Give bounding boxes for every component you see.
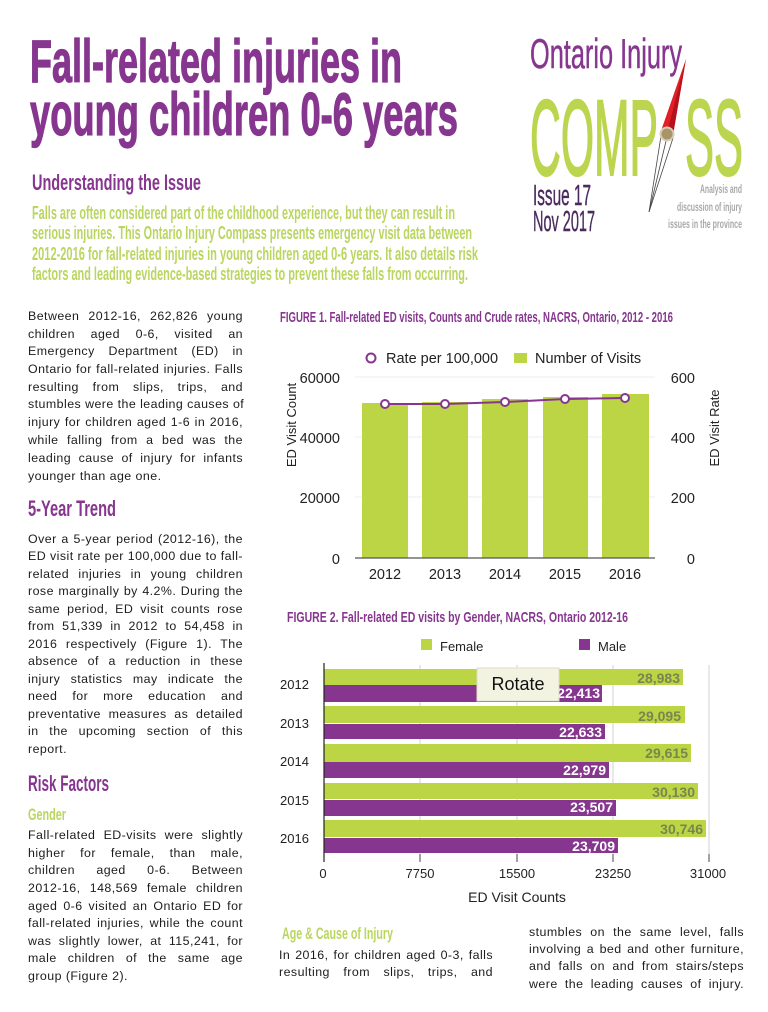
female value labels: 30,130: [652, 784, 695, 800]
text block: overview: [28, 309, 244, 483]
intro paragraph: serious injuries. This Ontario Injury Compass presents emergency visit data between: [32, 223, 472, 243]
text block: 5-year trend: from 51,339 in 2012 to 54,458 in: [28, 619, 243, 633]
text block: 5-year trend: Over a 5-year period (2012-16), the: [28, 532, 243, 546]
text block: overview: leading cause of injury for infants: [28, 451, 243, 465]
year labels: [280, 677, 309, 846]
intro paragraph: Falls are often considered part of the childhood experience, but they can result in: [32, 203, 455, 223]
legend: figure 1: [366, 351, 641, 367]
year labels: 2013: [280, 716, 309, 731]
text block: gender: [28, 828, 243, 983]
text block: 5-year trend: need for more education and: [28, 689, 243, 703]
legend: figure 1: Number of Visits: [535, 351, 641, 367]
heading: risk factors: Risk Factors: [28, 771, 109, 796]
text block: age and cause, column 1: In 2016, for children aged 0-3, falls: [279, 948, 493, 962]
text block: gender: Fall-related ED-visits were slightly: [28, 828, 243, 842]
text block: gender: was slightly lower, at 115,241, for: [28, 934, 243, 948]
logo: Ontario Injury Compass: Issue 17: [533, 180, 591, 212]
intro paragraph: 2012-2016 for fall-related injuries in young children aged 0-6 years. It also details risk: [32, 244, 479, 264]
text block: 5-year trend: ED visit rate per 100,000 due to fall-: [28, 549, 243, 563]
text block: gender: higher for female, than male,: [28, 846, 243, 860]
heading: 5-year trend: 5-Year Trend: [28, 496, 116, 521]
female value labels: [637, 670, 703, 837]
text block: age and cause, column 1: [279, 948, 493, 979]
title: Fall-related injuries in: [30, 28, 402, 95]
text block: overview: children aged 0-6, visited an: [28, 327, 243, 341]
x axis labels: 23250: [595, 866, 631, 881]
right axis labels: 400: [671, 431, 695, 447]
text block: age and cause, column 2: and falls on and from stairs/steps: [529, 959, 744, 973]
bars: number of visits: [362, 394, 649, 558]
male value labels: 22,979: [563, 762, 606, 778]
female value labels: 28,983: [637, 670, 680, 686]
legend: figure 2: [421, 639, 626, 654]
right axis labels: [671, 371, 695, 568]
title: [30, 28, 458, 148]
year labels: 2013: [429, 567, 461, 583]
text block: 5-year trend: same period, ED visit counts rose: [28, 602, 243, 616]
left axis labels: [300, 371, 340, 568]
tooltip: rotate: Rotate: [491, 674, 545, 694]
text block: 5-year trend: preventative measures as detailed: [28, 707, 243, 721]
bars: male: [324, 685, 618, 853]
right axis labels: 0: [687, 552, 695, 568]
icon: compass needle: [649, 59, 686, 212]
text block: 5-year trend: rose marginally by 4.2%. During the: [28, 584, 243, 598]
right axis labels: 600: [671, 371, 695, 387]
x axis labels: [319, 866, 726, 881]
text block: gender: children aged 0-6. Between: [28, 863, 243, 877]
text block: age and cause, column 2: involving a bed and other furniture,: [529, 942, 744, 956]
female value labels: 29,095: [638, 708, 681, 724]
x axis labels: 15500: [499, 866, 535, 881]
male value labels: 23,709: [572, 838, 615, 854]
text block: age and cause, column 1: resulting from slips, trips, and: [279, 965, 493, 979]
text block: 5-year trend: 2016 respectively (Figure 1). The: [28, 637, 243, 651]
year labels: 2016: [609, 567, 641, 583]
x axis labels: 31000: [690, 866, 726, 881]
text block: 5-year trend: injury statistics may indicate the: [28, 672, 243, 686]
text block: 5-year trend: report.: [28, 742, 67, 756]
text block: age and cause, column 2: stumbles on the same level, falls: [529, 925, 744, 939]
chart: figure 2 bar chart: [280, 639, 726, 905]
x axis labels: 0: [319, 866, 327, 881]
x axis title: ED Visit Counts: [468, 889, 566, 905]
year labels: 2012: [369, 567, 401, 583]
text block: gender: male children of the same age: [28, 951, 243, 965]
text block: 5-year trend: absence of a reduction in these: [28, 654, 243, 668]
year labels: 2016: [280, 831, 309, 846]
year labels: 2014: [489, 567, 521, 583]
right axis labels: 200: [671, 491, 695, 507]
male value labels: [557, 685, 615, 854]
text block: age and cause, column 2: were the leading causes of injury.: [529, 977, 744, 991]
legend: figure 2: Female: [440, 639, 483, 654]
text block: overview: while falling from a bed was the: [28, 433, 243, 447]
logo: Ontario Injury Compass: Nov 2017: [533, 206, 595, 238]
left axis labels: 0: [332, 552, 340, 568]
text block: gender: 2012-16, 148,569 female children: [28, 881, 243, 895]
year labels: 2015: [549, 567, 581, 583]
text block: 5-year trend: in the upcoming section of this: [28, 724, 243, 738]
text block: overview: resulting from slips, trips, and: [28, 380, 243, 394]
intro paragraph: factors and leading evidence-based strategies to prevent these falls from occurring.: [32, 264, 468, 284]
left axis labels: 20000: [300, 491, 340, 507]
year labels: 2012: [280, 677, 309, 692]
tooltip: rotate: [477, 668, 559, 701]
female value labels: 29,615: [645, 745, 688, 761]
right axis title: ED Visit Rate: [707, 389, 722, 467]
text block: age and cause, column 2: [529, 925, 744, 991]
line: rate per 100,000: [381, 394, 629, 408]
figure 2 title: FIGURE 2. Fall-related ED visits by Gender, NACRS, Ontario 2012-16: [287, 609, 628, 626]
left axis title: ED Visit Count: [284, 382, 299, 467]
logo: Ontario Injury Compass: [530, 30, 743, 238]
heading: age and cause of injury: Age & Cause of Injury: [282, 924, 393, 943]
text block: gender: group (Figure 2).: [28, 969, 128, 983]
text block: overview: Between 2012-16, 262,826 young: [28, 309, 243, 323]
text block: overview: younger than age one.: [28, 469, 161, 483]
female value labels: 30,746: [660, 821, 703, 837]
text block: gender: fall-related injuries, while the count: [28, 916, 243, 930]
year labels: [369, 567, 641, 583]
bars: female: [324, 669, 706, 837]
text block: gender: aged 0-6 visited an Ontario ED for: [28, 899, 243, 913]
male value labels: 22,413: [557, 685, 600, 701]
male value labels: 22,633: [559, 724, 602, 740]
intro paragraph: [32, 203, 479, 284]
left axis labels: 40000: [300, 431, 340, 447]
x axis labels: 7750: [406, 866, 434, 881]
year labels: 2015: [280, 793, 309, 808]
left axis labels: 60000: [300, 371, 340, 387]
text block: 5-year trend: [28, 532, 243, 756]
legend: figure 2: Male: [598, 639, 626, 654]
text block: overview: Ontario for fall-related injuries. Falls: [28, 362, 243, 376]
chart: figure 1 combo chart: [284, 351, 722, 583]
heading: gender: Gender: [28, 805, 66, 824]
text block: overview: injury for children aged 1-6 in 2016,: [28, 415, 243, 429]
text block: 5-year trend: related injuries in young children: [28, 567, 243, 581]
text block: overview: Emergency Department (ED) in: [28, 344, 243, 358]
text block: overview: stumbles were the leading causes of: [28, 397, 244, 411]
title: young children 0-6 years: [30, 81, 458, 148]
legend: figure 1: Rate per 100,000: [386, 351, 498, 367]
male value labels: 23,507: [570, 799, 613, 815]
year labels: 2014: [280, 754, 309, 769]
heading: understanding the issue: Understanding the Issue: [32, 170, 201, 195]
